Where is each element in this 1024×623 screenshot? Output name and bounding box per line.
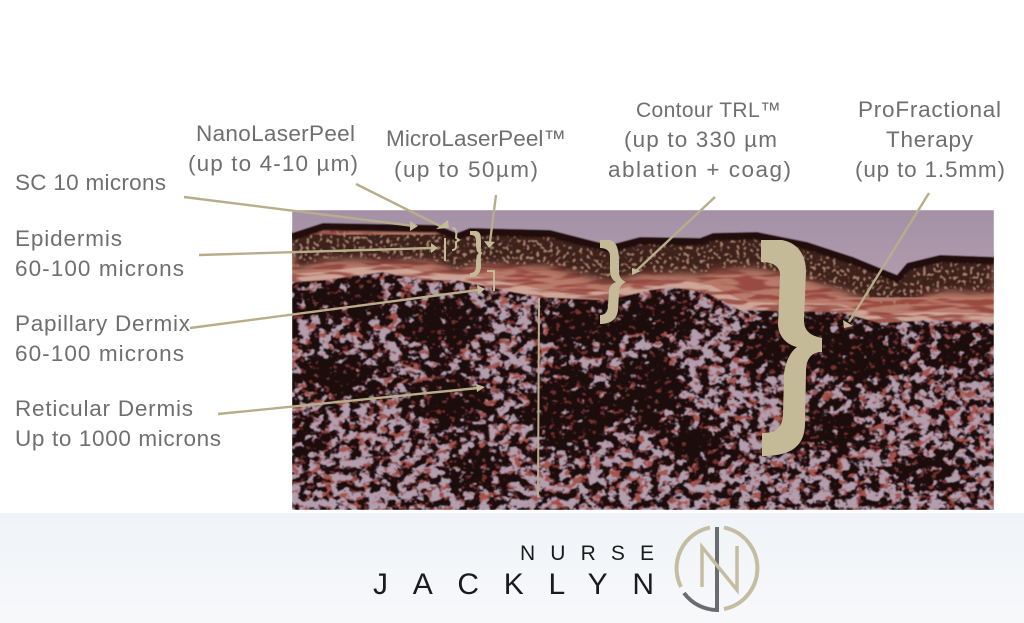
depth line: dermis (538, 298, 539, 497)
label: NanoLaserPeel: (up to 4-10 µm) (188, 151, 358, 176)
label: ProFractional Therapy: (up to 1.5mm) (855, 157, 1005, 182)
label: MicroLaserPeel (386, 126, 566, 182)
label: epidermis (15, 226, 184, 281)
brace: MicroLaserPeel (470, 231, 483, 277)
label: reticular dermis (15, 396, 221, 451)
label: papillary dermis: 60-100 microns (15, 341, 184, 366)
treatment labels (188, 97, 1005, 182)
skin histology cross-section image (285, 210, 994, 510)
small depth markers (444, 238, 495, 291)
arrow: reticular dermis (218, 384, 485, 414)
label: ProFractional Therapy (855, 97, 1005, 182)
label: Contour TRL: ablation + coag) (608, 157, 791, 182)
label: reticular dermis: Reticular Dermis (15, 396, 193, 421)
label: NanoLaserPeel (188, 121, 358, 176)
label: papillary dermis: Papillary Dermix (15, 311, 191, 336)
label: NanoLaserPeel: NanoLaserPeel (196, 121, 355, 146)
arrow: ProFractional (843, 193, 929, 328)
arrow: MicroLaserPeel (484, 195, 496, 248)
label: epidermis: 60-100 microns (15, 256, 184, 281)
label: Contour TRL: Contour TRL™ (636, 99, 781, 122)
label: stratum corneum: SC 10 microns (15, 170, 166, 195)
logo wordmark: JACKLYN (373, 568, 654, 601)
arrow: epidermis (199, 243, 438, 255)
arrows (184, 184, 929, 497)
sky above tissue (292, 210, 994, 275)
label: Contour TRL (608, 99, 791, 182)
arrow: papillary dermis (190, 285, 485, 328)
logo emblem (677, 527, 757, 610)
label: epidermis: Epidermis (15, 226, 122, 251)
footer band (0, 513, 1024, 623)
label: Contour TRL: (up to 330 µm (624, 127, 777, 152)
epidermis and pink papillary layer (292, 223, 994, 323)
brace: NanoLaserPeel (452, 228, 459, 250)
logo wordmark: NURSE (520, 542, 654, 565)
label: papillary dermis (15, 311, 191, 366)
logo wordmark (373, 542, 654, 601)
label: ProFractional Therapy: ProFractional (858, 97, 1001, 122)
label: reticular dermis: Up to 1000 microns (15, 426, 221, 451)
label: MicroLaserPeel: (up to 50µm) (394, 157, 538, 182)
label: MicroLaserPeel: MicroLaserPeel™ (386, 126, 566, 151)
arrow: Contour TRL (632, 197, 715, 275)
arrow: NanoLaserPeel (356, 184, 449, 229)
brace: Contour TRL (600, 240, 626, 324)
label: ProFractional Therapy: Therapy (886, 127, 974, 152)
brace: ProFractional (761, 240, 822, 456)
arrow: SC (184, 197, 418, 231)
left layer labels (15, 170, 221, 451)
logo: Nurse Jacklyn (373, 527, 757, 610)
